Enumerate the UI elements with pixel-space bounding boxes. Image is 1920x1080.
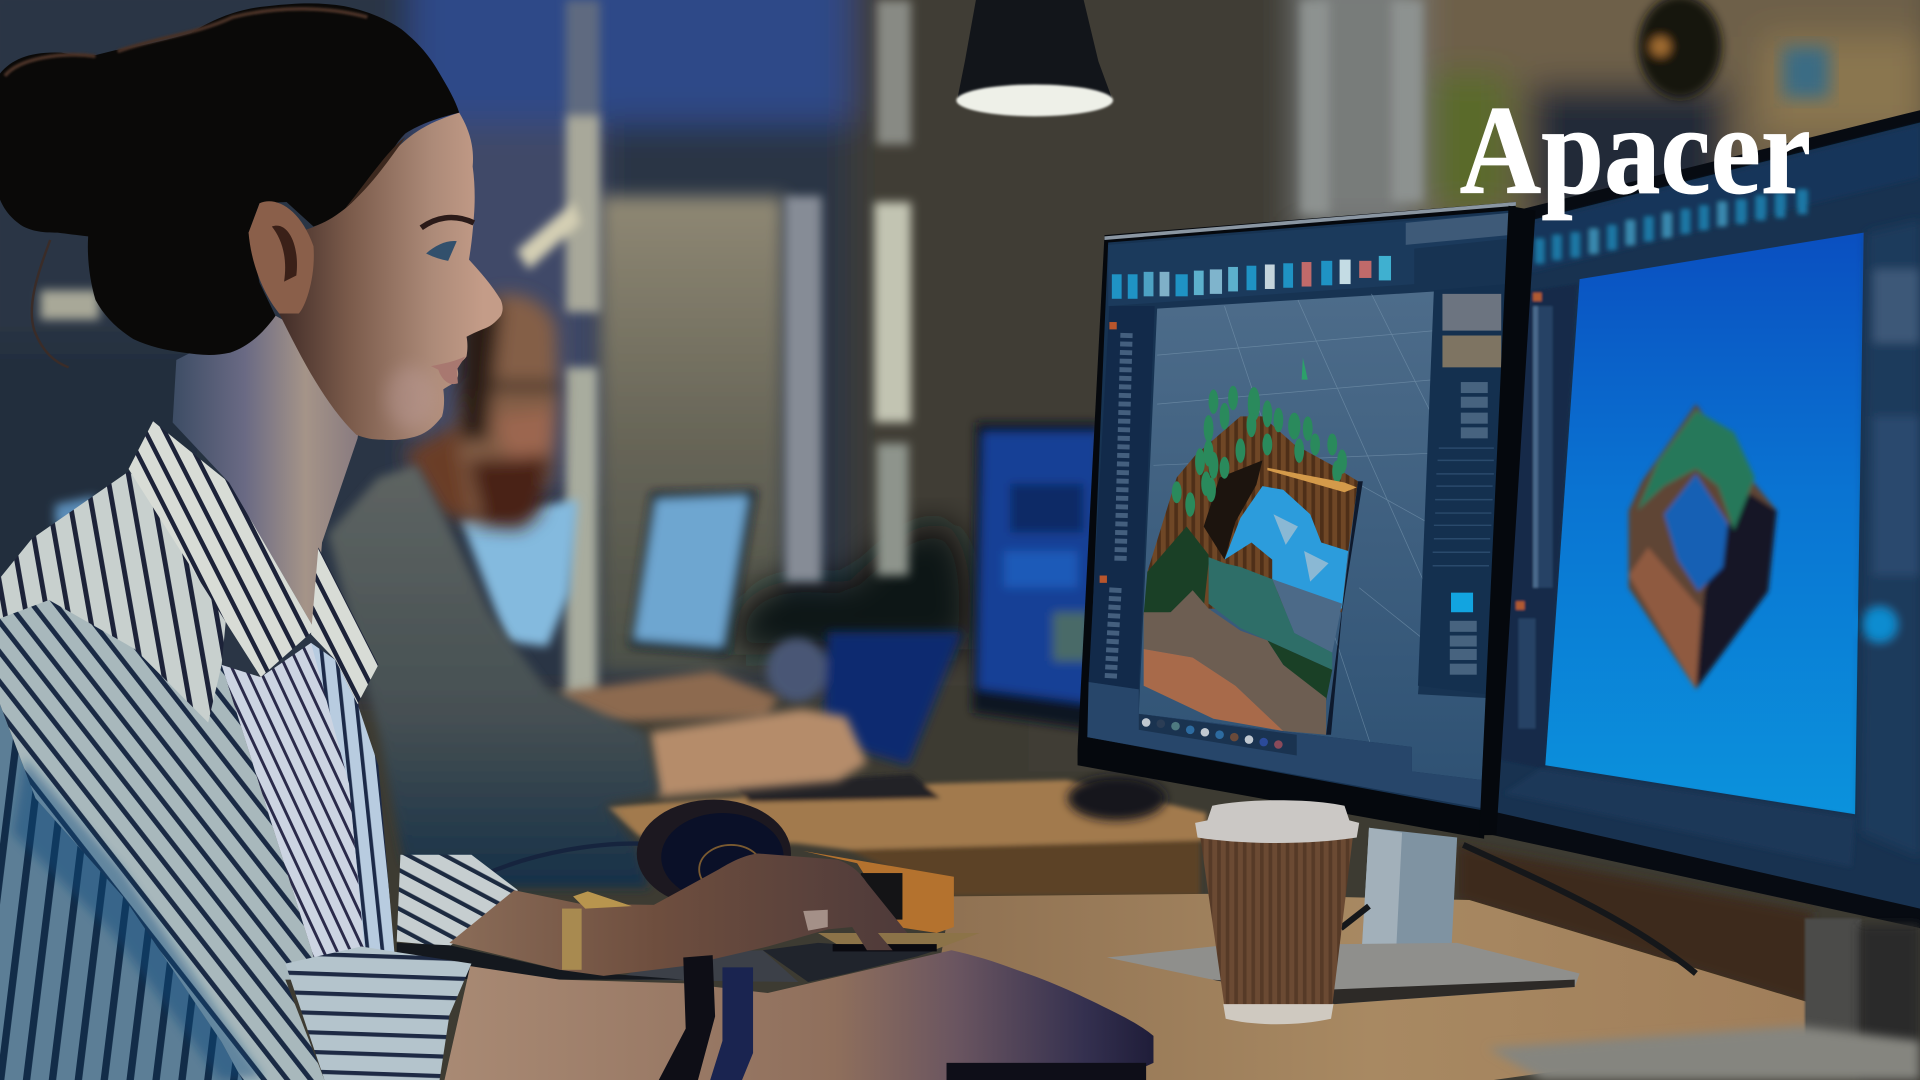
woman lower forearm and hand [444,950,1153,1080]
left monitor viewport grid [1139,291,1487,780]
middle monitor [629,490,757,655]
woman loose hair wisp [32,240,69,367]
woman sleeve blue shadow [12,759,263,1080]
woman watch [562,891,632,970]
woman lower torso [0,704,242,1080]
orange transform arrow [1267,468,1357,492]
woman thumbnail [803,910,828,931]
woman eye [426,241,457,261]
right monitor toolbar [1531,125,1920,272]
laptop [823,632,962,765]
left monitor screen [1087,211,1509,811]
woman face [279,113,503,440]
left monitor [1078,202,1516,839]
left monitor bottom bar [1087,682,1482,808]
blurred plants [735,524,971,655]
woman collar left [129,421,315,677]
far right blue monitor [972,422,1100,731]
island grey rock face [1272,579,1342,653]
left monitor toolbar [1108,213,1509,306]
colleague sweater [328,465,659,888]
right monitor side controls [1861,220,1920,857]
island rock [1147,416,1358,612]
monitor divider bezel [1479,206,1536,835]
woman lower cuff [285,947,471,1080]
blurred poster on far wall [1783,47,1829,98]
woman brow [421,218,474,228]
right wall below monitors [1457,845,1812,1007]
screen behind colleague [460,500,578,647]
woman sleeve [0,578,324,1080]
woman shoulder [0,471,229,722]
right monitor bottom bar [1504,769,1855,867]
left monitor right panel [1418,284,1506,694]
woman gap shadow between arms [397,943,683,980]
background monitors [55,422,1100,765]
woman neck [173,312,367,629]
woman collar right [311,547,378,704]
coffee cup [1195,800,1359,1024]
left monitor bezel [1078,202,1516,839]
island dark green band [1144,527,1209,615]
right monitor second stand [1488,918,1920,1080]
woman chest left [222,643,397,980]
blurred window and column highlights [40,0,1722,698]
background colleague [328,294,867,888]
right monitor [1482,110,1920,928]
right monitor 3D island preview [1629,404,1777,689]
right monitor blue canvas [1545,233,1864,814]
woman upper forearm and hand [449,853,907,976]
woman cheek highlight [386,366,435,430]
left monitor material strip [1139,714,1297,756]
sphere near laptop [767,638,828,702]
dark object on background desk [1068,776,1166,820]
island cave shadow [1204,460,1262,560]
island orange band [1144,649,1283,731]
headphones [485,800,954,933]
woman at desk [0,3,1153,1080]
woman bracelets [659,955,753,1080]
woman ear [249,201,314,313]
colleague head [404,294,558,529]
woman hair [0,3,459,355]
cup sleeve [1200,835,1353,1007]
woman upper cuff [397,855,518,947]
colleague back arm [556,671,779,722]
wall panel behind desks [600,196,784,673]
island dark edge [1326,481,1363,735]
woman chest right [311,643,397,980]
Apacer logo: Apacer [1460,80,1811,221]
trees [1172,386,1347,517]
keyboard and mouse [613,933,980,982]
cup lid [1195,800,1359,843]
pendant lamp [956,0,1113,116]
island grey-brown band [1144,590,1326,735]
island teal band [1209,557,1332,670]
island water [1224,486,1348,609]
monitor cables [1341,845,1696,973]
woman temple hair glow [345,137,405,208]
woman hand shadow [947,1063,1146,1080]
green gizmo [1302,358,1308,380]
monitor stand [1107,828,1580,1004]
background desk [606,774,1206,896]
left monitor left outliner [1089,306,1155,689]
woman bun highlight [5,9,367,76]
right monitor side list [1496,284,1577,769]
left monitor 3D island model [1144,358,1363,735]
foreground wooden desk [937,894,1806,1080]
woman lips [431,356,465,384]
right monitor screen [1489,122,1920,909]
right monitor bezel [1482,110,1920,928]
colleague front arm [650,709,867,797]
cup base [1223,1004,1333,1024]
